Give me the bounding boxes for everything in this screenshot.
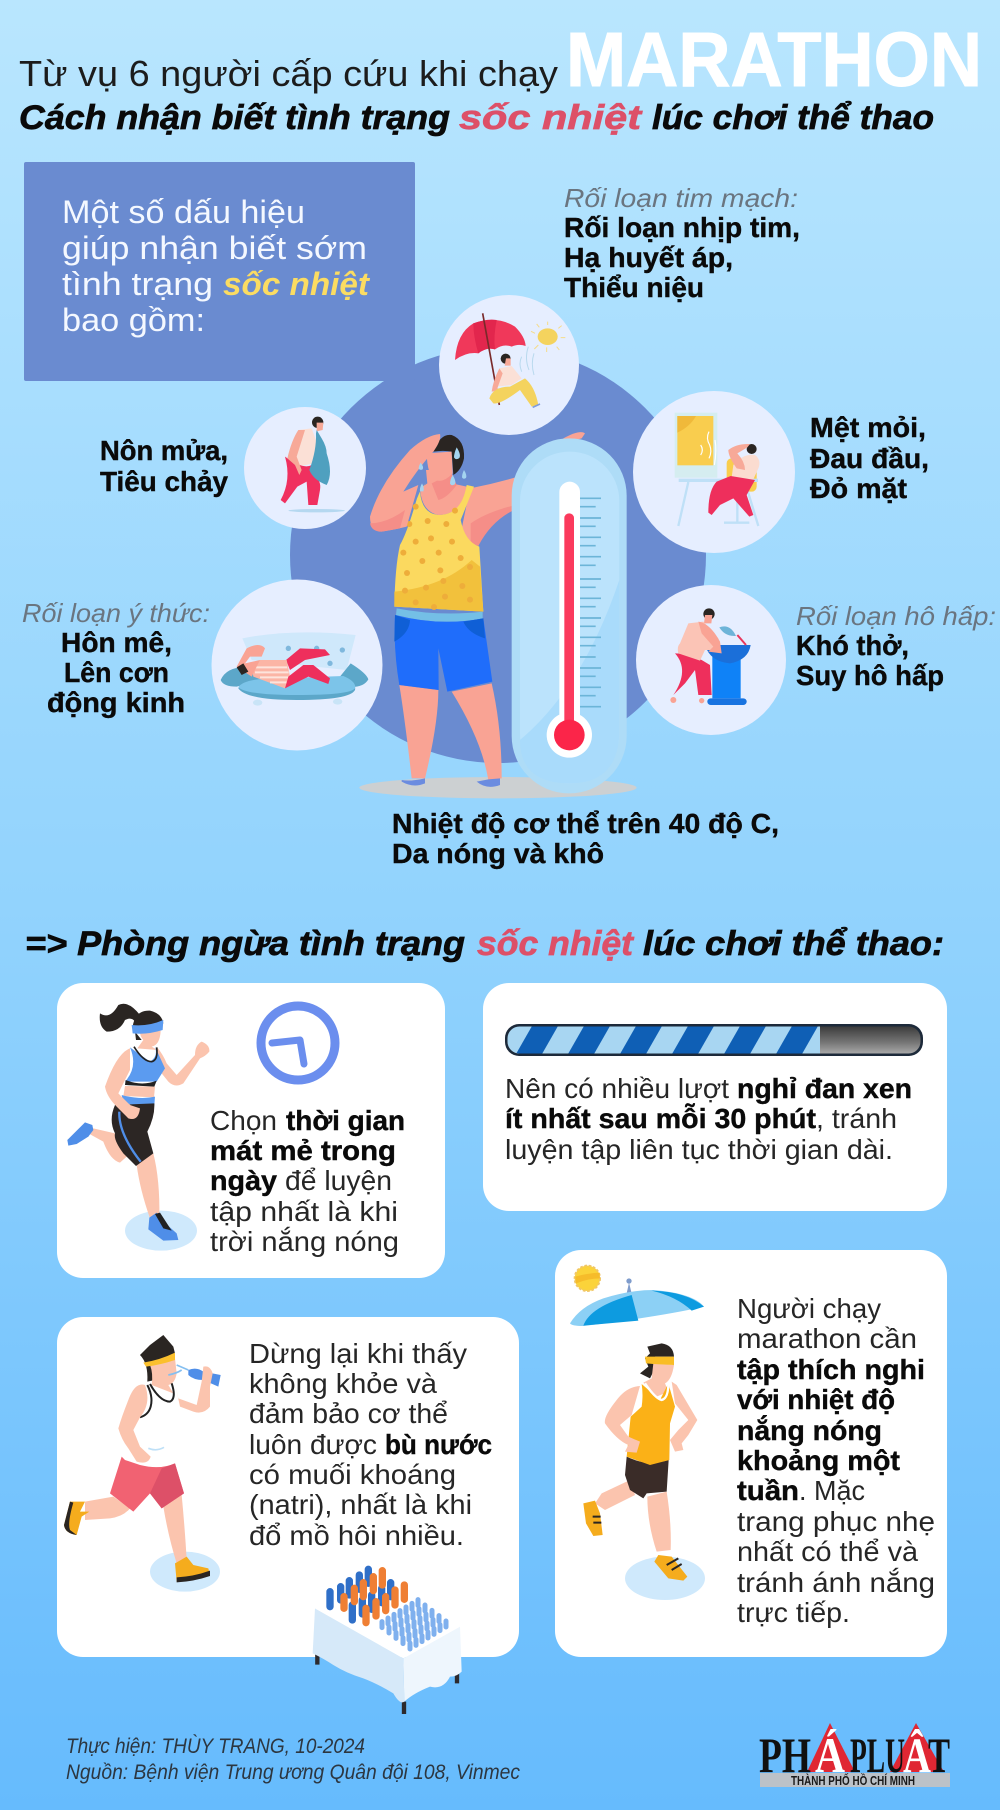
footer credits (66, 1735, 520, 1784)
logo: Pháp Luật (759, 1723, 950, 1788)
subtitle (19, 99, 934, 137)
text: (natri), nhất là khi (249, 1489, 472, 1520)
text: nhất có thể và (737, 1536, 919, 1567)
heading: prevention: sốc nhiệt (477, 925, 635, 963)
text: ít nhất sau mỗi 30 phút (505, 1103, 816, 1134)
text: fatigue: Đau đầu, (810, 443, 929, 474)
icon: person collapsed on sofa circle (212, 580, 382, 750)
heading: prevention: lúc chơi thể thao: (643, 925, 944, 963)
icon: person under umbrella circle (439, 295, 579, 435)
subtitle: lúc chơi thể thao (652, 99, 934, 137)
subtitle: Cách nhận biết tình trạng (19, 99, 450, 137)
text (249, 1338, 492, 1551)
illustration: female runner (67, 1004, 209, 1251)
text: body temperature: Nhiệt độ cơ thể trên 40 độ C, (392, 808, 779, 839)
text: Dừng lại khi thấy (249, 1338, 467, 1369)
text (210, 1105, 405, 1257)
text: khoảng một (737, 1445, 900, 1476)
ground shadow (359, 777, 637, 798)
text: đổ mồ hôi nhiều. (249, 1520, 464, 1551)
illustration: runner drinking (64, 1335, 221, 1592)
text: cardiovascular symptoms: Rối loạn tim mạch: (564, 183, 798, 213)
text: body temperature (392, 808, 779, 869)
text: tuần (737, 1475, 799, 1506)
person (370, 432, 585, 787)
panel: rest intervals (483, 983, 947, 1211)
logo: Pháp Luật: PLU (850, 1727, 905, 1783)
panel: intro box: tình trạng (62, 266, 213, 302)
text: altered consciousness: Hôn mê, (61, 627, 172, 658)
illustration: water table (313, 1569, 462, 1714)
text: altered consciousness: động kinh (47, 687, 185, 718)
text: mát mẻ trong (210, 1135, 396, 1166)
text: cardiovascular symptoms: Rối loạn nhịp tim, (564, 212, 800, 243)
text: tập nhất là khi (210, 1196, 398, 1227)
panel: intro box: Một số dấu hiệu (62, 194, 305, 230)
panel: intro box: bao gồm: (62, 302, 205, 338)
text: trang phục nhẹ (737, 1506, 935, 1537)
logo: Pháp Luật: THÀNH PHỐ HỒ CHÍ MINH (791, 1773, 915, 1788)
text (737, 1293, 935, 1628)
subtitle: sốc nhiệt (459, 99, 643, 137)
text: vomiting: Nôn mửa, (100, 435, 228, 466)
heading: prevention: => Phòng ngừa tình trạng (25, 925, 465, 963)
logo: Pháp Luật: PH (759, 1727, 811, 1783)
text: cardiovascular symptoms (564, 183, 800, 303)
text: respiratory symptoms: Suy hô hấp (796, 660, 944, 691)
text (505, 1073, 912, 1165)
text: marathon cần (737, 1323, 917, 1354)
text: thời gian (286, 1105, 405, 1136)
text: , tránh (816, 1103, 897, 1134)
title (19, 17, 982, 103)
text: Nên có nhiều lượt (505, 1073, 729, 1104)
text: respiratory symptoms: Rối loạn hô hấp: (796, 601, 996, 631)
illustration: overheated person with thermometer (359, 432, 637, 798)
text: luyện tập liên tục thời gian dài. (505, 1134, 893, 1165)
text: vomiting: Tiêu chảy (100, 466, 229, 497)
text: respiratory symptoms (796, 601, 996, 691)
text: tập thích nghi (737, 1354, 925, 1385)
illustration: runner in yellow tank (583, 1343, 705, 1600)
text: luôn được (249, 1429, 377, 1460)
text: cardiovascular symptoms: Thiểu niệu (564, 272, 704, 303)
icon: vomiting person circle (244, 407, 366, 529)
heading: prevention (25, 925, 944, 963)
text: không khỏe và (249, 1368, 438, 1399)
text: ngày (210, 1165, 278, 1196)
text: với nhiệt độ (737, 1384, 895, 1415)
logo: Pháp Luật: T (928, 1727, 950, 1783)
text: nghỉ đan xen (737, 1073, 912, 1104)
text: respiratory symptoms: Khó thở, (796, 630, 909, 661)
footer credits: Nguồn: Bệnh viện Trung ương Quân đội 108, Vinmec (66, 1761, 520, 1784)
illustration: sun and umbrella (570, 1266, 704, 1326)
panel: intro box: giúp nhận biết sớm (62, 230, 367, 266)
icon: clock (261, 1006, 335, 1080)
text: để luyện (285, 1165, 392, 1196)
text: đảm bảo cơ thể (249, 1398, 448, 1429)
text: altered consciousness: Lên cơn (64, 657, 169, 688)
thermometer (512, 438, 627, 793)
icon: person at fountain circle (636, 585, 786, 735)
text: altered consciousness (22, 598, 210, 718)
text: nắng nóng (737, 1415, 882, 1446)
text: altered consciousness: Rối loạn ý thức: (22, 598, 210, 628)
text: bù nước (385, 1429, 492, 1460)
text: Chọn (210, 1105, 277, 1136)
panel: hydration (57, 1317, 519, 1657)
text: trực tiếp. (737, 1597, 850, 1628)
text: fatigue: Đỏ mặt (810, 473, 907, 504)
text: body temperature: Da nóng và khô (392, 838, 604, 869)
text: . Mặc (799, 1475, 865, 1506)
panel: heat acclimatization (555, 1250, 947, 1657)
text: fatigue: Mệt mỏi, (810, 412, 926, 443)
text: fatigue (810, 412, 929, 504)
panel: cool time of day (57, 983, 445, 1278)
logo: Pháp Luật: Á (815, 1727, 845, 1783)
text: tránh ánh nắng (737, 1567, 935, 1598)
big blue circle backdrop (290, 347, 706, 763)
panel: intro box (24, 162, 415, 381)
title: Từ vụ 6 người cấp cứu khi chạy (19, 53, 558, 94)
text: vomiting (100, 435, 229, 497)
icon: tired person at easel circle (633, 391, 795, 553)
text: trời nắng nóng (210, 1226, 399, 1257)
title: MARATHON (566, 17, 982, 103)
logo: Pháp Luật: Ậ (903, 1727, 931, 1783)
text: có muối khoáng (249, 1459, 456, 1490)
panel: intro box: sốc nhiệt (223, 266, 370, 302)
text: Người chạy (737, 1293, 881, 1324)
footer credits: Thực hiện: THÙY TRANG, 10-2024 (66, 1735, 365, 1758)
text: cardiovascular symptoms: Hạ huyết áp, (564, 242, 733, 273)
progress bar (505, 1024, 923, 1056)
